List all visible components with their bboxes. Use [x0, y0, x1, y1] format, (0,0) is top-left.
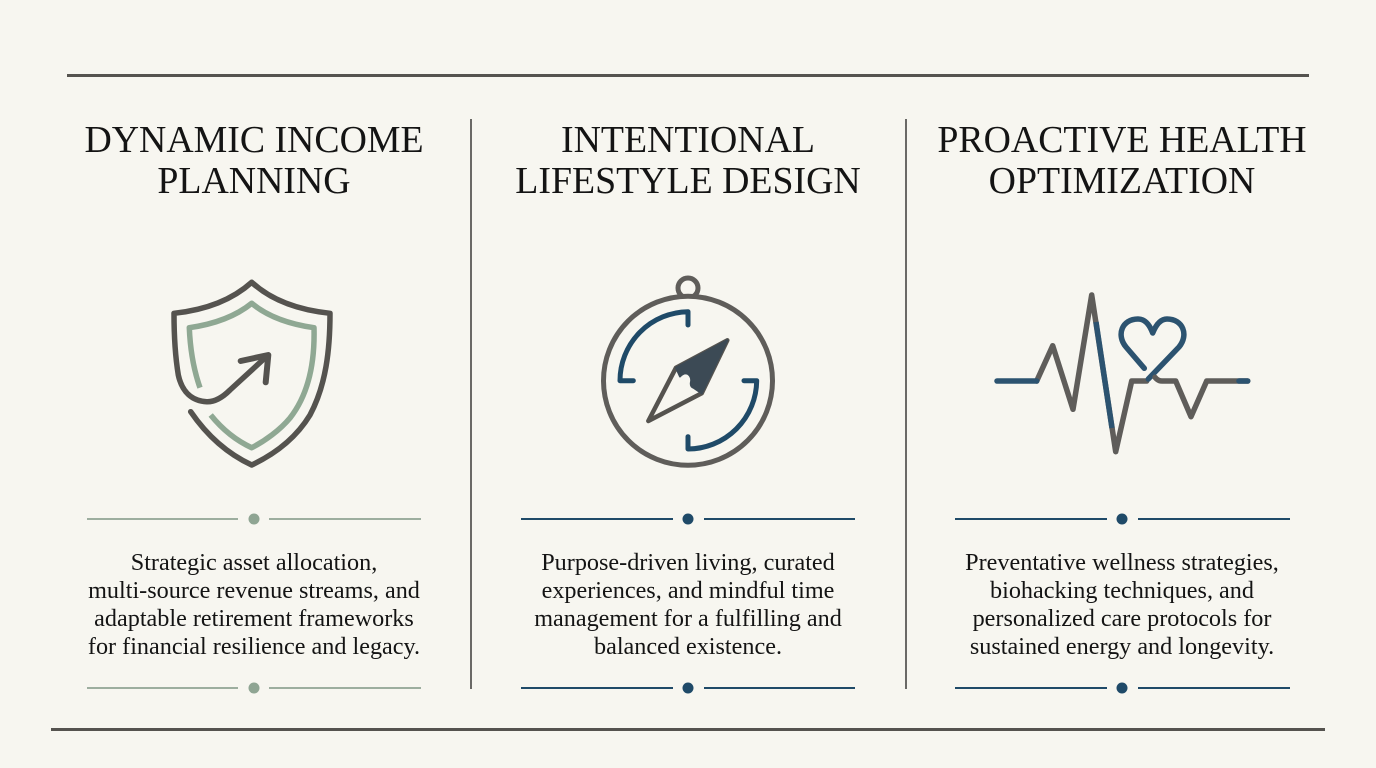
description: health: sustained energy and longevity. [970, 633, 1274, 660]
ornament: column 2 top [521, 514, 855, 524]
description: lifestyle: experiences, and mindful time [542, 577, 834, 604]
bottom rule [51, 728, 1325, 731]
description: lifestyle: balanced existence. [594, 633, 782, 660]
icon: compass [604, 278, 772, 465]
ornament: column 3 bottom [955, 682, 1290, 694]
description: income: for financial resilience and legacy. [88, 633, 420, 660]
description: income: adaptable retirement frameworks [94, 605, 414, 632]
heading: intentional lifestyle design: INTENTIONAL [561, 119, 815, 161]
description: lifestyle: management for a fulfilling and [534, 605, 842, 632]
column divider right [905, 119, 906, 689]
heading: proactive health optimization [937, 119, 1307, 202]
description: income: multi-source revenue streams, and [88, 577, 420, 604]
ornament: column 2 bottom [521, 682, 855, 694]
heading: intentional lifestyle design: LIFESTYLE DESIGN [515, 160, 861, 202]
description: health: biohacking techniques, and [990, 577, 1254, 604]
description: lifestyle [534, 549, 842, 660]
description: income: Strategic asset allocation, [131, 549, 377, 576]
top rule [67, 74, 1309, 77]
icon: heartbeat with heart [997, 295, 1248, 452]
heading: dynamic income planning: DYNAMIC INCOME [84, 119, 424, 161]
description: lifestyle: Purpose-driven living, curated [541, 549, 835, 576]
ornament: column 3 top [955, 514, 1290, 524]
description: health: Preventative wellness strategies, [965, 549, 1279, 576]
description: health: personalized care protocols for [973, 605, 1271, 632]
ornament: column 1 bottom [87, 682, 421, 694]
description: income [88, 549, 420, 660]
heading: intentional lifestyle design [515, 119, 861, 202]
panel: intentional lifestyle design [515, 119, 861, 660]
icon: shield with rising arrow [174, 282, 330, 465]
heading: dynamic income planning: PLANNING [157, 160, 351, 202]
heading: proactive health optimization: OPTIMIZATION [989, 160, 1255, 202]
heading: dynamic income planning [84, 119, 424, 202]
heading: proactive health optimization: PROACTIVE HEALTH [937, 119, 1307, 161]
panel: proactive health optimization [937, 119, 1307, 660]
ornament: column 1 top [87, 514, 421, 524]
column divider left [470, 119, 472, 689]
description: health [965, 549, 1279, 660]
panel: dynamic income planning [84, 119, 424, 660]
